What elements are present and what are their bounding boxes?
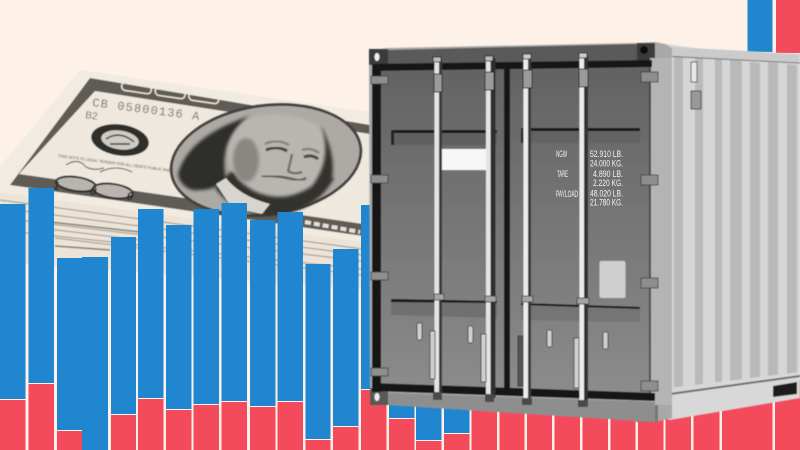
PAYLOAD: 21.780 KG. bbox=[590, 198, 623, 208]
door handles bbox=[417, 323, 608, 388]
shipping container bbox=[369, 42, 800, 422]
bar 13 bbox=[333, 249, 358, 450]
TARE: TARE bbox=[557, 169, 568, 180]
centre black seam bbox=[504, 68, 510, 388]
top header bbox=[388, 44, 637, 64]
bar 1 bbox=[0, 204, 26, 450]
serial number: CB 05800136 A bbox=[92, 96, 201, 124]
bar 17 bbox=[444, 380, 470, 450]
collar bbox=[216, 178, 270, 214]
door panels bbox=[381, 58, 655, 395]
PAYLOAD: 48.020 LB. bbox=[590, 188, 623, 200]
cheek shading bbox=[233, 138, 259, 182]
locking rods bbox=[434, 54, 588, 405]
TARE bbox=[557, 169, 623, 189]
NGW: NGW bbox=[556, 149, 567, 160]
banknote inner field bbox=[19, 91, 370, 225]
face bbox=[228, 115, 325, 197]
eyes bbox=[266, 148, 318, 159]
bar 16 bbox=[416, 380, 442, 450]
corrugation bbox=[674, 55, 797, 389]
treasury seal bbox=[89, 121, 151, 159]
bar 12 bbox=[306, 264, 330, 450]
bar 15 bbox=[389, 380, 414, 450]
top right red bar bbox=[776, 0, 800, 53]
portrait oval bbox=[162, 91, 370, 229]
rod top brackets bbox=[433, 53, 588, 92]
banknote stack bbox=[0, 70, 370, 290]
hair left bbox=[178, 116, 250, 190]
container door front bbox=[369, 42, 672, 422]
signatures bbox=[66, 161, 132, 172]
TARE: 4.890 LB. bbox=[593, 169, 623, 180]
bar 5 bbox=[111, 237, 136, 450]
NGW: 52.910 LB. bbox=[590, 149, 623, 160]
door recesses bbox=[391, 128, 640, 322]
bottom black band bbox=[372, 383, 655, 401]
NGW bbox=[556, 149, 623, 170]
bar 10 bbox=[250, 220, 276, 450]
bottom rail bbox=[670, 372, 800, 420]
TARE: 2.220 KG. bbox=[593, 178, 623, 189]
red bars behind the container bbox=[472, 380, 800, 450]
side vent bbox=[773, 382, 797, 397]
bottom sill bbox=[388, 393, 655, 422]
side tag bbox=[691, 62, 701, 109]
banknote printed border bbox=[10, 78, 370, 237]
left black post bbox=[372, 66, 381, 392]
coat bbox=[215, 170, 334, 216]
series label: B2 bbox=[85, 110, 99, 123]
legal tender text: THIS NOTE IS LEGAL TENDER FOR ALL DEBTS PUBLIC AND PRIVATE bbox=[58, 153, 189, 175]
bar 9 bbox=[222, 203, 247, 450]
top banknote paper bbox=[0, 70, 370, 243]
bar 2 bbox=[28, 188, 54, 450]
PAYLOAD bbox=[556, 188, 623, 208]
rod middle brackets bbox=[434, 294, 589, 304]
corner post right bbox=[650, 58, 672, 405]
top ornament numerals bbox=[121, 82, 219, 104]
bar 3 bbox=[57, 258, 82, 450]
nose and mouth bbox=[288, 154, 302, 173]
bar 8 bbox=[194, 209, 219, 450]
NGW: 24.000 KG. bbox=[590, 158, 623, 170]
top black band bbox=[372, 60, 652, 71]
hinges bbox=[371, 72, 658, 391]
bar 14 bbox=[361, 205, 386, 450]
hair right bbox=[298, 128, 333, 198]
white blank label bbox=[440, 149, 487, 170]
top right blue bar bbox=[748, 0, 772, 52]
PAYLOAD: PAYLOAD bbox=[556, 189, 578, 200]
container side wall bbox=[665, 44, 800, 420]
top rail bbox=[672, 47, 800, 62]
denomination 100: 100 bbox=[51, 178, 136, 203]
bar 4 bbox=[82, 257, 108, 450]
worn label bbox=[600, 261, 626, 298]
bar 6 bbox=[138, 209, 164, 450]
lower right border detail bbox=[305, 222, 360, 232]
corner castings bbox=[369, 43, 658, 422]
rod feet bbox=[433, 392, 588, 407]
door weight markings bbox=[556, 149, 623, 208]
bar 7 bbox=[166, 225, 192, 450]
bar 11 bbox=[278, 212, 303, 450]
stack edge bbox=[0, 192, 370, 290]
